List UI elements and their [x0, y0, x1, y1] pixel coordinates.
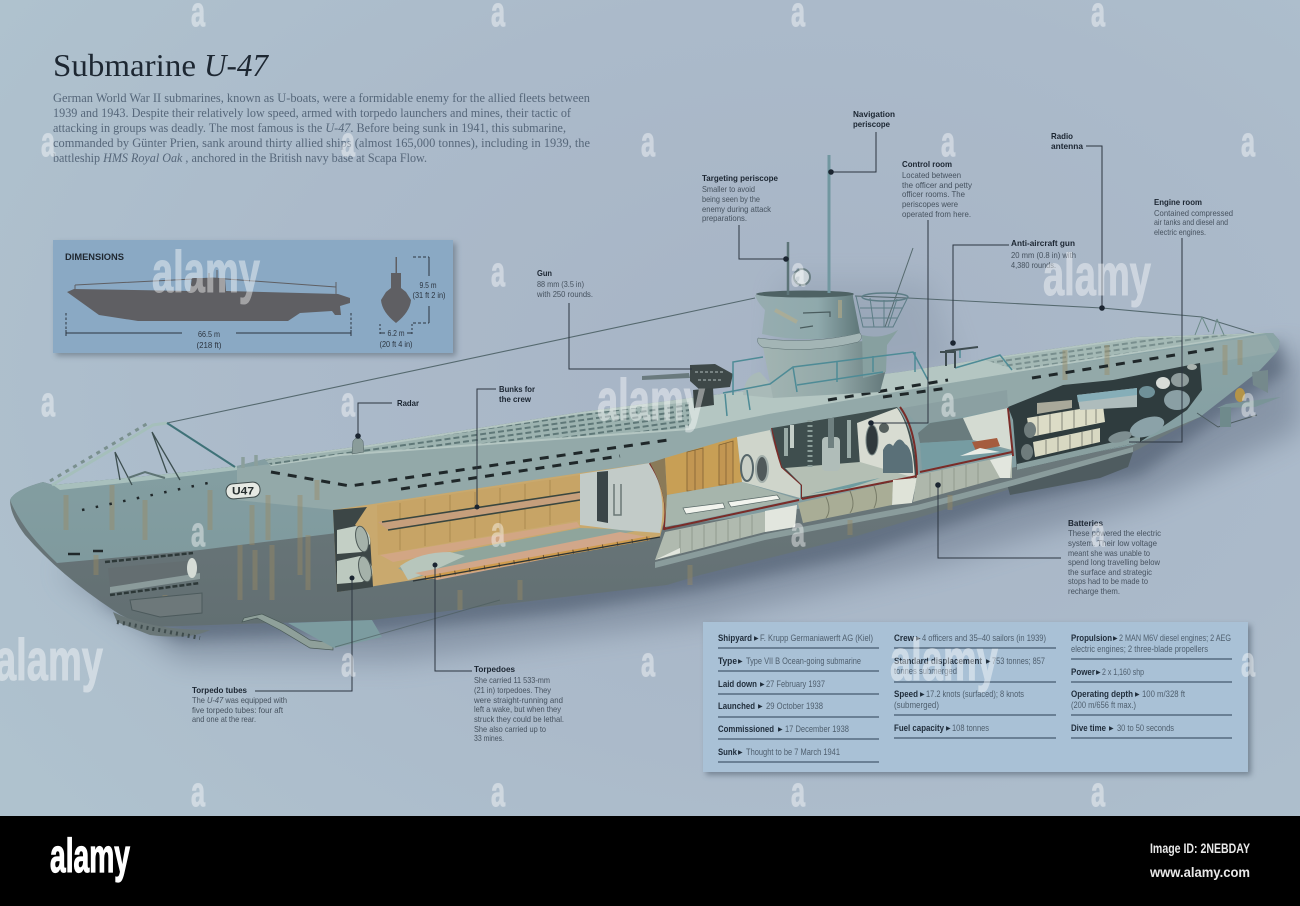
close hull shadow	[100, 340, 1285, 640]
light deck edge at bow	[53, 466, 237, 490]
watermark: alamy	[597, 368, 705, 433]
upper hull above waterline	[10, 333, 1280, 563]
forward bulkhead	[580, 463, 662, 533]
bow tank opening	[105, 553, 202, 617]
width measure: (20 ft 4 in)	[380, 339, 413, 349]
aft antenna posts	[1195, 317, 1224, 335]
title: Submarine	[53, 47, 196, 83]
column 2 specs: Crew	[894, 633, 915, 643]
callout: torpedoes	[432, 562, 564, 743]
footer logo: alamy	[50, 829, 130, 882]
periscope machinery	[786, 418, 849, 471]
column 1 specs	[718, 633, 879, 762]
compressors	[1077, 388, 1137, 410]
lower room 3	[798, 478, 917, 523]
U47 plate	[225, 482, 261, 499]
callout: navigation periscope: Navigation	[853, 109, 895, 119]
column 2 specs: ▶	[916, 636, 921, 642]
watermark: alamy	[152, 240, 260, 305]
column 3 specs: Propulsion	[1071, 633, 1112, 643]
callout: radio antenna: antenna	[1051, 141, 1083, 151]
callout: engine room: electric engines.	[1154, 227, 1206, 237]
torpedo	[400, 552, 465, 580]
targeting periscope	[787, 242, 789, 295]
dive plane	[242, 600, 500, 650]
tube chamber	[333, 507, 373, 592]
callout: control room: operated from here.	[902, 209, 971, 219]
callout: gun	[536, 268, 692, 369]
intro text: commanded by Günter Prien, sank around thirty allied ships (almost 165,000 tonnes), including in 1939, the	[53, 135, 590, 150]
callout: engine room: air tanks and diesel and	[1154, 217, 1228, 227]
lower bunk	[380, 522, 580, 562]
column 1 specs: Shipyard	[718, 633, 752, 643]
height measure	[412, 257, 446, 323]
callout: engine room	[1129, 197, 1233, 442]
callout: torpedoes: were straight-running and	[473, 695, 563, 705]
callout: control room: periscopes were	[902, 199, 958, 209]
height measure: 9.5 m	[420, 280, 436, 290]
callout: bunks: Bunks for	[499, 384, 536, 394]
callout: torpedoes: 33 mines.	[474, 733, 504, 743]
callout: radar	[355, 398, 420, 439]
callout: control room: the officer and petty	[902, 180, 973, 190]
vents	[271, 348, 1218, 489]
title: U-47	[204, 47, 270, 83]
callout: torpedoes: struck they could be lethal.	[474, 714, 564, 724]
column 1 specs: 17 December 1938	[785, 724, 849, 734]
watermark: a	[1241, 638, 1255, 685]
watermark: a	[491, 508, 505, 555]
doors	[687, 441, 733, 491]
callout: targeting periscope: preparations.	[702, 213, 747, 223]
conning tower	[743, 290, 885, 398]
fairing dome	[743, 372, 773, 398]
callout: batteries: spend long travelling below	[1068, 557, 1161, 567]
keel teeth	[113, 612, 210, 638]
callout: control room: officer rooms. The	[902, 189, 965, 199]
column 1 specs: Commissioned	[718, 724, 774, 734]
callout: batteries: the surface and strategic	[1068, 567, 1153, 577]
portholes	[741, 455, 768, 482]
watermark: a	[791, 768, 805, 815]
mast	[885, 248, 913, 327]
batteries / diesel banks	[1021, 405, 1105, 460]
deck rails	[723, 350, 1012, 416]
watermark: a	[791, 508, 805, 555]
watermark: a	[941, 118, 955, 165]
callout: navigation periscope: periscope	[853, 119, 890, 129]
stern gear	[1197, 370, 1281, 427]
column 1 specs: 27 February 1937	[766, 679, 825, 689]
callout: anti-aircraft gun: 4,380 rounds.	[1011, 260, 1056, 270]
column 2 specs: 17.2 knots (surfaced); 8 knots	[926, 689, 1024, 699]
watermark: a	[341, 638, 355, 685]
callout: batteries	[935, 482, 1162, 596]
df loop	[794, 269, 810, 285]
intro text: attacking in groups was deadly. The most famous is the U-47. Before being sunk in 1941, this submarine,	[53, 120, 566, 135]
lower room 4	[913, 455, 1012, 502]
side silhouette	[67, 270, 350, 321]
crew figures	[883, 439, 913, 473]
net cutter	[50, 422, 235, 485]
tubes	[337, 525, 374, 584]
callout: torpedoes: left a wake, but when they	[474, 704, 562, 714]
column 2 specs: Standard displacement	[894, 656, 982, 666]
column 3 specs: (200 m/656 ft max.)	[1071, 700, 1136, 710]
watermark: a	[41, 378, 55, 425]
callout: batteries: These powered the electric	[1068, 528, 1162, 538]
submarine cutaway illustration	[10, 155, 1300, 660]
callout: gun: with 250 rounds.	[536, 289, 593, 299]
watermark: a	[641, 638, 655, 685]
width measure	[380, 324, 413, 349]
collar	[758, 333, 862, 350]
watermark: a	[1091, 508, 1105, 555]
height measure: (31 ft 2 in)	[412, 290, 446, 300]
watermark: a	[341, 118, 355, 165]
callout: anti-aircraft gun: 20 mm (0.8 in) with	[1011, 250, 1076, 260]
floor planks	[413, 532, 660, 581]
column 2 specs: ▶	[986, 659, 991, 665]
watermark: a	[1241, 378, 1255, 425]
under-bunk torpedo space	[398, 528, 640, 578]
column 1 specs: ▶	[754, 636, 759, 642]
column 3 specs: 2 MAN M6V diesel engines; 2 AEG	[1119, 633, 1231, 643]
intro text: battleship HMS Royal Oak , anchored in the British navy base at Scapa Flow.	[53, 150, 427, 165]
callout: targeting periscope: being seen by the	[702, 194, 760, 204]
anti-aircraft gun	[940, 347, 978, 368]
callout: torpedo tubes: and one at the rear.	[192, 714, 256, 724]
deck grating aft	[985, 334, 1250, 370]
callout: torpedo tubes	[192, 576, 354, 724]
room 2: officers	[650, 428, 802, 560]
watermark: a	[791, 248, 805, 295]
watermark: a	[641, 118, 655, 165]
callout: batteries: system. Their low voltage	[1068, 538, 1157, 548]
watermark: a	[491, 248, 505, 295]
column 2 specs: 4 officers and 35–40 sailors (in 1939)	[922, 633, 1046, 643]
column 1 specs: Sunk	[718, 747, 738, 757]
column 1 specs: Type	[718, 656, 737, 666]
watermark: a	[491, 768, 505, 815]
back diesel bank	[1037, 400, 1072, 414]
website: www.alamy.com	[1149, 864, 1250, 880]
column 2 specs: Fuel capacity	[894, 723, 944, 733]
intro text	[53, 90, 590, 165]
watermark: a	[941, 378, 955, 425]
callout: torpedo tubes: five torpedo tubes: four aft	[192, 705, 284, 715]
panel: specifications	[703, 622, 1251, 775]
callout: anti-aircraft gun	[950, 238, 1076, 346]
callout: navigation periscope	[828, 109, 895, 175]
column 3 specs	[1071, 633, 1232, 738]
side length measure: 66.5 m	[198, 329, 220, 339]
column 3 specs: 100 m/328 ft	[1142, 689, 1185, 699]
callout: targeting periscope: enemy during attack	[702, 204, 772, 214]
callout: bunks: the crew	[499, 394, 531, 404]
panel: dimensions	[53, 240, 456, 356]
intro text: 1939 and 1943. Despite their relatively low speed, armed with torpedo launchers and mines, their tactic of	[53, 105, 572, 120]
room 1: torpedo room and bunks	[333, 463, 668, 592]
bunk wall	[377, 475, 580, 555]
column 2 specs	[894, 633, 1056, 738]
callout: batteries: meant she was unable to	[1068, 548, 1150, 558]
column 3 specs: 2 x 1,160 shp	[1102, 667, 1144, 677]
callout: radio antenna: Radio	[1051, 131, 1073, 141]
column 3 specs: ▶	[1135, 692, 1140, 698]
callout: control room: Located between	[902, 170, 961, 180]
navigation periscope	[828, 155, 830, 293]
side band above cutaways	[237, 335, 1276, 510]
callout: radar: Radar	[397, 398, 420, 408]
column 3 specs: ▶	[1109, 726, 1114, 732]
room 3: control room	[772, 407, 917, 523]
column 2 specs: ▶	[920, 692, 925, 698]
keel	[1007, 452, 1133, 495]
column 1 specs: ▶	[760, 682, 765, 688]
footer bar	[0, 816, 1300, 906]
callout: targeting periscope: Smaller to avoid	[702, 184, 755, 194]
column 3 specs: ▶	[1113, 636, 1118, 642]
callout: batteries: Batteries	[1068, 518, 1103, 528]
column 1 specs: ▶	[738, 750, 743, 756]
column 3 specs: ▶	[1096, 670, 1101, 676]
intro text: German World War II submarines, known as U-boats, were a formidable enemy for the allied fleets between	[53, 90, 590, 105]
callout: torpedo tubes: The U-47 was equipped with	[192, 695, 287, 705]
watermark: a	[1091, 768, 1105, 815]
callout: torpedoes: She also carried up to	[474, 724, 546, 734]
column 1 specs: 29 October 1938	[766, 701, 823, 711]
front silhouette	[381, 257, 411, 323]
rust streaks	[66, 340, 1240, 612]
callout: targeting periscope	[702, 173, 789, 262]
watermark: a	[191, 768, 205, 815]
callout: radio antenna	[1051, 131, 1105, 311]
column 1 specs: F. Krupp Germaniawerft AG (Kiel)	[760, 633, 873, 643]
callout: batteries: recharge them.	[1068, 586, 1120, 596]
deck	[265, 333, 1266, 466]
column 2 specs: Speed	[894, 689, 918, 699]
column 1 specs: ▶	[778, 727, 783, 733]
lower tower	[763, 340, 885, 398]
callout: gun: 88 mm (3.5 in)	[537, 279, 584, 289]
column 1 specs: ▶	[738, 659, 743, 665]
upper bunk	[378, 492, 580, 530]
U47 plate: U47	[232, 486, 254, 498]
bow vent holes	[82, 483, 208, 510]
deck gun	[642, 364, 733, 408]
column 2 specs: 108 tonnes	[952, 723, 989, 733]
watermark: a	[1241, 118, 1255, 165]
callout: control room	[868, 159, 973, 426]
callout: targeting periscope: Targeting periscope	[702, 173, 778, 183]
hull	[10, 333, 1280, 627]
watermark: a	[341, 378, 355, 425]
callout: gun: Gun	[537, 268, 552, 278]
column 2 specs: (submerged)	[894, 700, 939, 710]
wide hull shadow	[60, 350, 1300, 660]
electric motors	[1107, 364, 1197, 445]
engine room	[1008, 363, 1202, 470]
callout: torpedo tubes: Torpedo tubes	[192, 685, 247, 695]
callout: control room: Control room	[902, 159, 952, 169]
callout: torpedoes: She carried 11 533-mm	[474, 675, 550, 685]
column 1 specs: Thought to be 7 March 1941	[746, 747, 840, 757]
lower tank 2	[655, 505, 797, 560]
antenna wire	[167, 296, 1254, 423]
column 2 specs: ▶	[946, 726, 951, 732]
watermark: alamy	[1043, 243, 1151, 308]
column 3 specs: Power	[1071, 667, 1095, 677]
column 1 specs: Type VII B Ocean-going submarine	[746, 656, 861, 666]
hull lower band	[655, 447, 1133, 568]
room 4: petty officers	[903, 390, 1013, 502]
column 1 specs: ▶	[758, 704, 763, 710]
side length measure	[66, 313, 351, 350]
callout: engine room: Engine room	[1154, 197, 1202, 207]
column 2 specs: 753 tonnes; 857	[992, 656, 1045, 666]
callout: anti-aircraft gun: Anti-aircraft gun	[1011, 238, 1075, 248]
tower shadow	[770, 280, 960, 400]
dimensions heading: DIMENSIONS	[65, 252, 124, 263]
pressure hull band	[903, 390, 1008, 425]
column 3 specs: 30 to 50 seconds	[1117, 723, 1174, 733]
column 3 specs: electric engines; 2 three-blade propellers	[1071, 644, 1208, 654]
width measure: 6.2 m	[388, 328, 404, 338]
watermark: alamy	[890, 628, 998, 693]
column 2 specs: tonnes submerged	[894, 666, 957, 676]
bollards	[243, 455, 256, 468]
column 1 specs: Laid down	[718, 679, 757, 689]
callout: torpedoes: Torpedoes	[474, 664, 515, 674]
column 1 specs: Launched	[718, 701, 755, 711]
image id: Image ID: 2NEBDAY	[1150, 840, 1250, 856]
callout: bunks	[474, 384, 536, 510]
upper tower	[755, 293, 860, 339]
side length measure: (218 ft)	[196, 340, 222, 350]
radar	[352, 438, 364, 454]
column 3 specs: Dive time	[1071, 723, 1106, 733]
watermark: a	[191, 508, 205, 555]
watermark: a	[41, 118, 55, 165]
column 3 specs: Operating depth	[1071, 689, 1133, 699]
callout: batteries: stops had to be made to	[1068, 576, 1148, 586]
callout: engine room: Contained compressed	[1154, 208, 1233, 218]
wintergarten	[856, 293, 908, 378]
callout: torpedoes: (21 in) torpedoes. They	[474, 685, 552, 695]
bow vent marks	[68, 551, 103, 554]
